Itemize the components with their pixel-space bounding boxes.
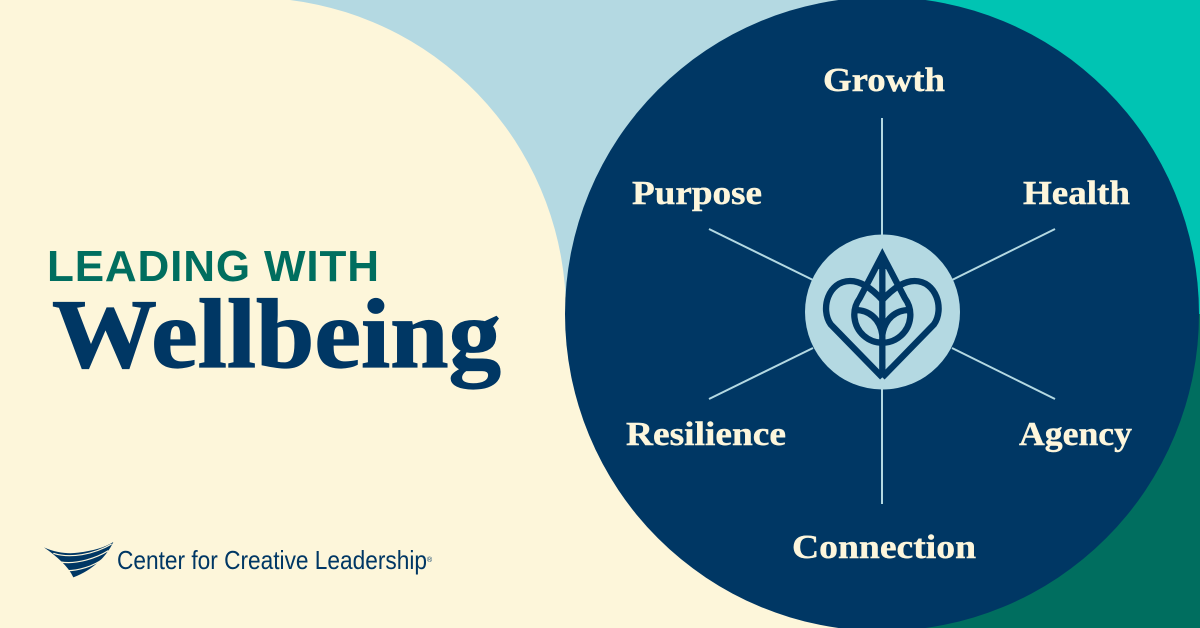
icon: wing [44, 542, 113, 577]
center circle [805, 234, 960, 390]
background: cream shape [0, 0, 882, 628]
heading: wellbeing: Wellbeing [52, 280, 501, 389]
label: growth: Growth [823, 62, 945, 99]
label: connection: Connection [792, 529, 976, 566]
icon: heart, drop and leaf [826, 248, 939, 377]
background: teal quadrant [882, 0, 1200, 314]
logo wordmark: Center for Creative Leadership [117, 545, 427, 575]
logo: center for creative leadership [44, 542, 433, 577]
navy circle panel [565, 0, 1199, 628]
background: green quadrant [882, 314, 1200, 628]
spoke lines [709, 118, 1055, 504]
label: purpose: Purpose [632, 175, 762, 212]
label: health: Health [1023, 175, 1130, 212]
background: light blue quadrant [0, 0, 882, 314]
label: agency: Agency [1019, 416, 1132, 453]
label: resilience: Resilience [626, 416, 786, 453]
heading: leading with: LEADING WITH [47, 242, 379, 291]
registered mark: ® [427, 556, 433, 564]
